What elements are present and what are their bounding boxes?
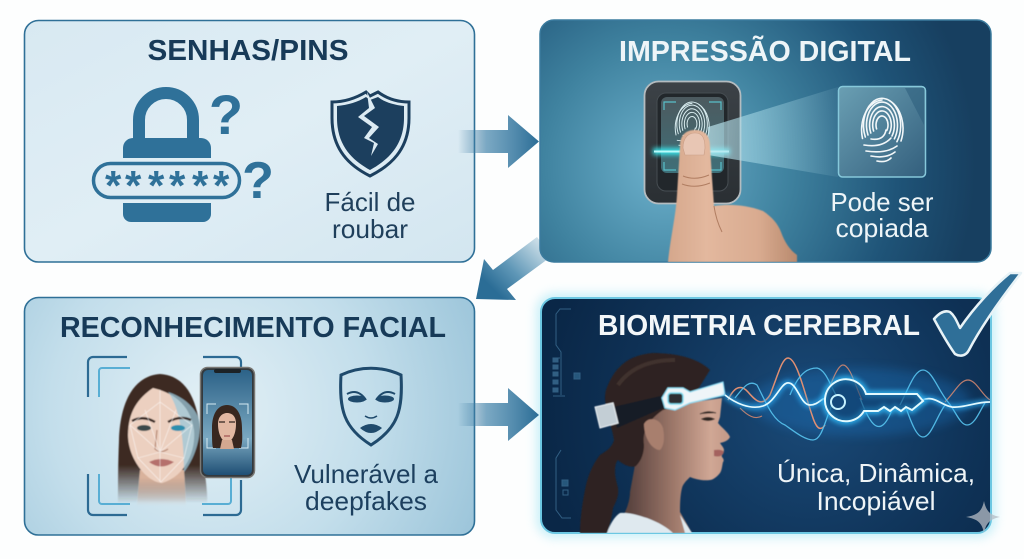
eye and lips xyxy=(700,412,716,420)
heading: reconhecimento facial: RECONHECIMENTO FACIAL xyxy=(60,312,446,344)
label: fácil de roubar: Fácil de xyxy=(324,187,416,217)
fingerprint card xyxy=(838,86,926,177)
hud decoration xyxy=(553,309,580,518)
hand pressing scanner xyxy=(668,130,797,262)
icon: question mark upper: ? xyxy=(209,83,243,146)
arrow: reconhecimento facial to biometria cerebral xyxy=(458,388,539,441)
icon: question mark lower: ? xyxy=(242,152,274,210)
icon: check mark xyxy=(934,273,1021,356)
label: única, dinâmica, incopiável: Incopiável xyxy=(816,486,936,516)
scan brackets xyxy=(88,357,241,515)
label: pode ser copiada xyxy=(830,187,934,243)
icon: cracked shield xyxy=(332,92,409,176)
heading: senhas/pins: SENHAS/PINS xyxy=(148,35,348,67)
icon: sparkle xyxy=(966,501,1000,533)
panel: impressão digital xyxy=(540,20,991,262)
label: vulnerável a deepfakes: Vulnerável a xyxy=(294,459,439,489)
label: única, dinâmica, incopiável xyxy=(777,458,975,516)
panel: biometria cerebral xyxy=(536,293,996,538)
hair and ponytail xyxy=(580,353,710,533)
icon: padlock with password: ****** xyxy=(105,162,230,209)
neck and face xyxy=(624,397,730,533)
heading: biometria cerebral: BIOMETRIA CEREBRAL xyxy=(598,310,920,342)
strap xyxy=(613,395,665,428)
panel: senhas/pins xyxy=(24,20,474,262)
heading: impressão digital: IMPRESSÃO DIGITAL xyxy=(619,34,911,68)
arrow: senhas to impressão digital xyxy=(458,115,539,168)
label: vulnerável a deepfakes: deepfakes xyxy=(305,486,427,516)
icon: mask xyxy=(341,368,401,445)
back module xyxy=(595,403,618,428)
icon: padlock with password xyxy=(94,93,240,222)
scanner device xyxy=(644,82,740,204)
headband xyxy=(662,382,725,410)
label: vulnerável a deepfakes xyxy=(294,459,439,516)
face with scan mesh xyxy=(118,374,207,506)
label: pode ser copiada: Pode ser xyxy=(830,187,934,217)
label: única, dinâmica, incopiável: Única, Dinâmica, xyxy=(777,458,975,488)
light beam xyxy=(708,87,838,177)
label: fácil de roubar xyxy=(324,187,416,244)
key xyxy=(825,379,923,421)
ear xyxy=(644,419,664,450)
shirt xyxy=(607,513,692,533)
brainwaves and glowing key xyxy=(725,358,990,440)
woman in profile with headset xyxy=(580,353,730,533)
label: fácil de roubar: roubar xyxy=(332,214,408,244)
phone with face xyxy=(200,368,254,478)
panel: reconhecimento facial xyxy=(24,298,474,535)
arrow: impressão digital to reconhecimento facial xyxy=(476,237,552,300)
label: pode ser copiada: copiada xyxy=(836,213,929,243)
